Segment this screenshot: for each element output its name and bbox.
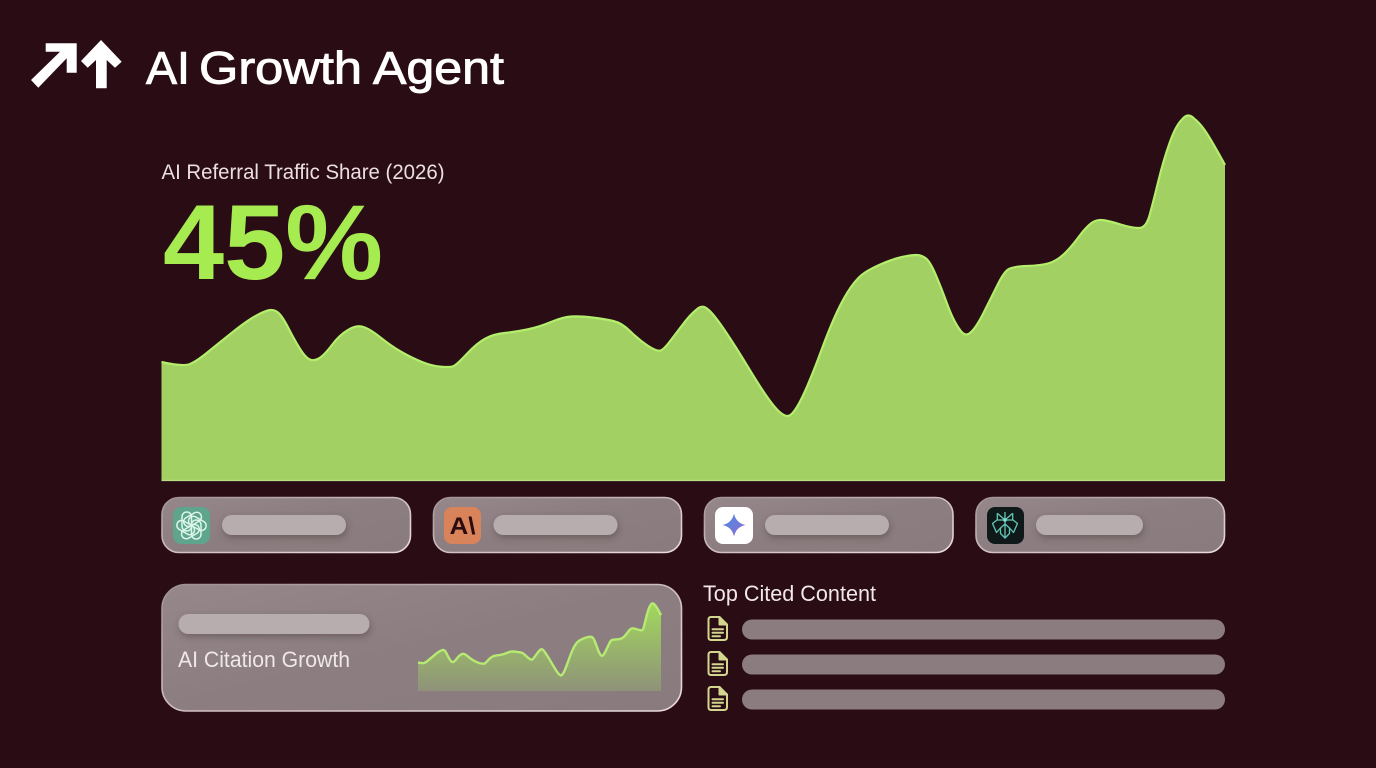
placeholder bar	[222, 515, 346, 535]
title: Growth	[199, 42, 362, 94]
main area chart	[162, 115, 1225, 480]
icon: ChatGPT	[173, 507, 210, 544]
icon: Anthropic	[444, 507, 481, 544]
panel: Anthropic card	[434, 498, 682, 552]
list heading: Top Cited Content	[703, 581, 876, 606]
icon: Gemini	[715, 507, 753, 544]
content bar	[742, 620, 1225, 640]
list row 1	[708, 617, 1225, 640]
placeholder bar	[765, 515, 889, 535]
icon: Anthropic: A\	[450, 513, 476, 540]
panel: ChatGPT card	[162, 498, 410, 552]
metric value: 45%	[163, 182, 383, 302]
panel: Top Cited Content	[703, 581, 1225, 710]
placeholder bar	[1036, 515, 1143, 535]
title: AI	[146, 42, 190, 94]
icon: document	[708, 652, 727, 675]
panel: Perplexity card	[976, 498, 1224, 552]
panel: Gemini card	[704, 498, 953, 552]
title: Agent	[373, 42, 505, 94]
list row 3	[708, 687, 1225, 710]
placeholder bar	[178, 614, 370, 634]
content bar	[742, 654, 1225, 674]
placeholder bar	[494, 515, 618, 535]
icon: document	[708, 617, 727, 640]
icon: Perplexity	[987, 507, 1024, 544]
panel: AI Citation Growth	[162, 584, 682, 711]
icon: document	[708, 687, 727, 710]
content bar	[742, 690, 1225, 710]
panel label: AI Citation Growth	[178, 647, 350, 672]
metric label: AI Referral Traffic Share (2026)	[162, 160, 444, 184]
mini area chart	[418, 603, 661, 691]
list row 2	[708, 652, 1225, 675]
logo: growth arrows	[31, 40, 122, 88]
title	[146, 42, 505, 94]
